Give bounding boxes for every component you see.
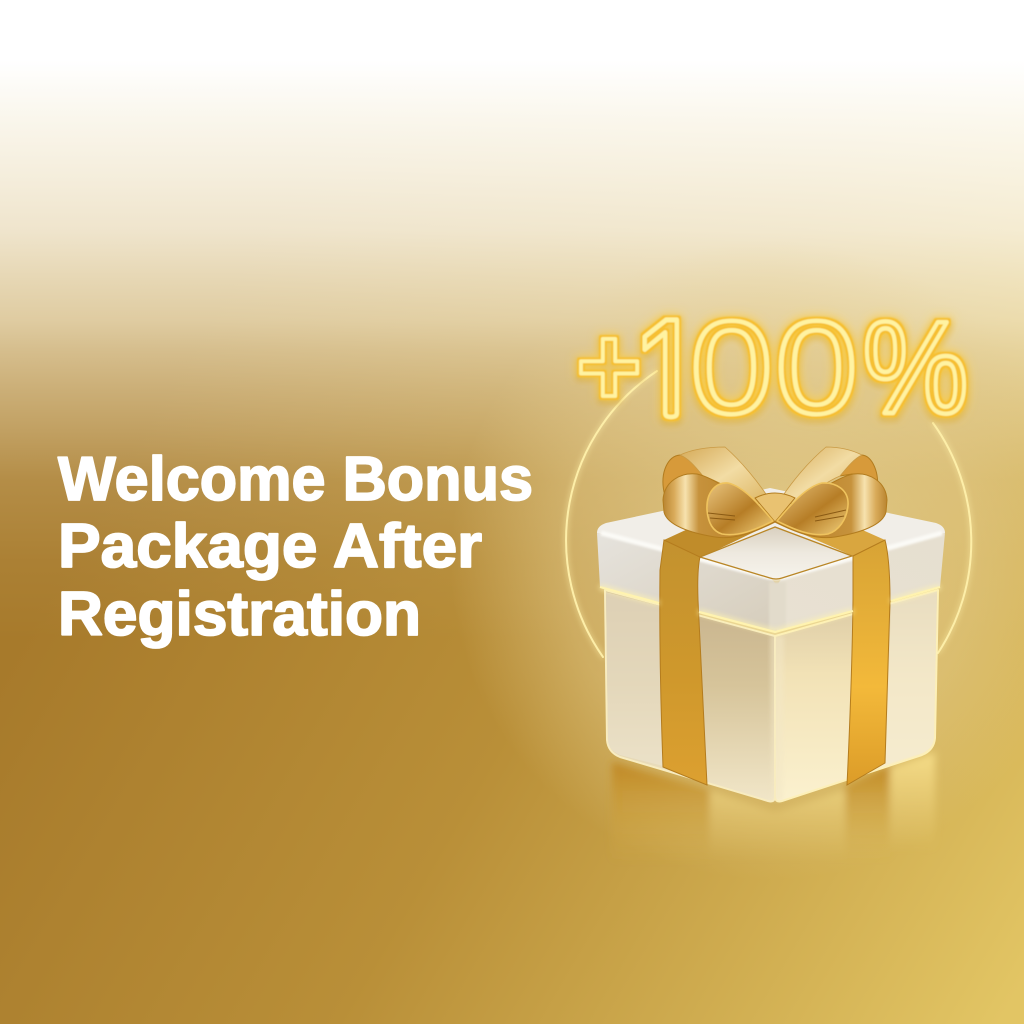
box body: right face xyxy=(775,590,938,801)
left vertical ribbon xyxy=(660,540,707,785)
title: welcome bonus package xyxy=(58,445,533,649)
title: welcome bonus package: Registration xyxy=(58,580,421,649)
neon +100% headline: 1 xyxy=(632,288,705,457)
title: welcome bonus package: Package After xyxy=(58,512,482,581)
front right loop xyxy=(775,474,887,538)
gold bow xyxy=(663,447,887,538)
body corner highlight xyxy=(770,636,784,800)
neon ring behind gift xyxy=(566,371,971,657)
lid top face xyxy=(597,488,945,580)
neon +100% headline: % xyxy=(863,293,968,441)
back right loop xyxy=(782,447,878,505)
lid left face xyxy=(597,533,777,632)
title: welcome bonus package: Welcome Bonus xyxy=(58,445,533,514)
top face diamond xyxy=(700,527,852,579)
box body: left face xyxy=(605,590,775,801)
glowing lid seam xyxy=(600,587,940,632)
lid top bevel highlight xyxy=(601,533,942,578)
lid right face xyxy=(777,533,945,632)
back left loop xyxy=(663,447,768,505)
center knot xyxy=(755,493,795,522)
top ribbon wedges xyxy=(664,522,775,558)
neon +100% headline xyxy=(571,308,974,428)
front left loop xyxy=(663,474,775,538)
gift box xyxy=(597,488,945,801)
right vertical ribbon xyxy=(847,540,890,785)
neon +100% headline: + xyxy=(576,303,642,429)
body outer panels, lighter xyxy=(606,592,663,766)
lid vertical corner bevel xyxy=(769,582,786,631)
gift reflection on floor xyxy=(612,752,935,862)
neon +100% headline: 0 xyxy=(690,293,773,441)
neon +100% headline: 0 xyxy=(775,293,858,441)
